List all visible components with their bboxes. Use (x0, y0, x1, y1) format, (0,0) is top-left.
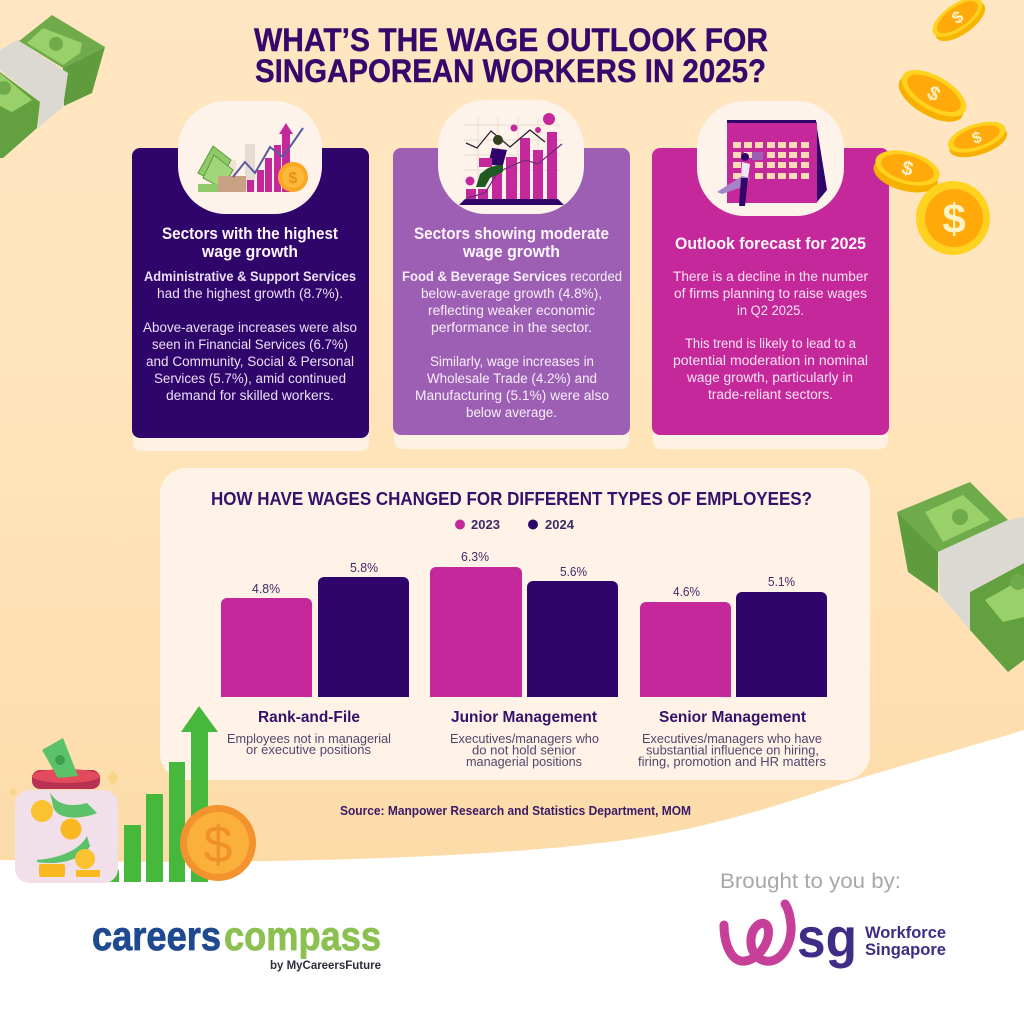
icon: person on bar chart (459, 113, 564, 205)
icon: money stack right (897, 482, 1024, 672)
category: rank-and-file (227, 709, 391, 757)
text block: demand for skilled workers. (166, 388, 334, 403)
title (254, 22, 768, 89)
category: rank-and-file: Rank-and-File (258, 709, 360, 726)
heading (162, 225, 338, 261)
icon: money stack top left (0, 15, 105, 158)
text block: potential moderation in nominal (673, 353, 868, 368)
text block: Food & Beverage Services recorded (402, 269, 622, 284)
category: senior management: substantial influence on hiring, (646, 744, 819, 758)
icon: money and rising bars (198, 123, 308, 192)
icon: falling coins: $ (899, 157, 915, 181)
logo: careers compass: careers (92, 913, 221, 959)
icon: money jar (9, 738, 119, 883)
legend (455, 518, 574, 532)
heading (414, 225, 609, 261)
icon: falling coins (870, 0, 1011, 255)
heading: wage growth (201, 243, 298, 261)
icon: falling coins: $ (942, 195, 966, 242)
text block: There is a decline in the number (673, 269, 869, 284)
category: senior management: firing, promotion and HR matters (638, 755, 826, 769)
panel: wage chart (160, 468, 870, 780)
text block: seen in Financial Services (6.7%) (152, 337, 348, 352)
text block: wage growth, particularly in (686, 370, 853, 385)
category: senior management: Senior Management (659, 709, 807, 726)
category: senior management: Executives/managers who have (642, 732, 822, 746)
legend: 2023 (471, 518, 500, 532)
logo: workforce singapore: Workforce (865, 924, 946, 942)
title: SINGAPOREAN WORKERS IN 2025? (255, 53, 766, 89)
bar chart (221, 550, 827, 697)
icon: coin (180, 805, 256, 881)
icon: money and rising bars: $ (289, 170, 298, 187)
category: senior management (638, 709, 826, 769)
text block: in Q2 2025. (737, 303, 804, 318)
logo: workforce singapore (724, 904, 946, 969)
bar chart: 4.8% (252, 582, 280, 596)
heading: Sectors with the highest (162, 225, 338, 243)
chart title: HOW HAVE WAGES CHANGED FOR DIFFERENT TYPES OF EMPLOYEES? (211, 489, 812, 509)
category: junior management: Executives/managers who (450, 732, 599, 746)
icon: falling coins: $ (948, 7, 967, 28)
legend: 2024 (545, 518, 574, 532)
heading: Sectors showing moderate (414, 225, 609, 243)
text block: trade-reliant sectors. (708, 387, 833, 402)
category: junior management (450, 709, 599, 769)
panel: outlook forecast (652, 101, 889, 449)
category: junior management: managerial positions (466, 755, 582, 769)
text block: Above-average increases were also (143, 320, 357, 335)
logo: careers compass: compass (224, 913, 381, 959)
text block: This trend is likely to lead to a (685, 336, 856, 351)
category: rank-and-file: or executive positions (246, 743, 371, 757)
heading: Outlook forecast for 2025 (675, 235, 866, 253)
icon: falling coins: $ (923, 82, 944, 106)
text block: and Community, Social & Personal (146, 354, 354, 369)
category: junior management: Junior Management (451, 709, 598, 726)
heading: wage growth (462, 243, 560, 261)
category: rank-and-file: Employees not in managerial (227, 732, 391, 746)
icon: coin: $ (204, 816, 233, 874)
icon: calendar (717, 120, 827, 206)
panel: sectors with highest wage growth (132, 101, 369, 451)
text block (402, 269, 622, 420)
bar chart: 5.8% (350, 561, 378, 575)
text block: Wholesale Trade (4.2%) and (427, 371, 597, 386)
bar chart: 4.6% (673, 585, 700, 599)
logo: workforce singapore: Singapore (865, 941, 946, 959)
icon: falling coins: $ (970, 129, 984, 148)
logo: careers compass (92, 913, 381, 972)
title: WHAT’S THE WAGE OUTLOOK FOR (254, 22, 768, 58)
icon: green rising bars with arrow (107, 706, 218, 882)
text block (143, 269, 357, 403)
text block: had the highest growth (8.7%). (157, 286, 343, 301)
panel: sectors showing moderate wage growth (393, 100, 630, 449)
category: junior management: do not hold senior (472, 744, 576, 758)
logo: careers compass: by MyCareersFuture (270, 960, 381, 972)
text block: performance in the sector. (431, 320, 592, 335)
text block (673, 269, 869, 402)
text block: below average. (466, 405, 557, 420)
text block: Services (5.7%), amid continued (154, 371, 346, 386)
text block: Similarly, wage increases in (430, 354, 594, 369)
text block: Administrative & Support Services (144, 269, 356, 284)
logo: workforce singapore: sg (797, 906, 857, 969)
bar chart: 5.1% (768, 575, 795, 589)
text block: reflecting weaker economic (428, 303, 595, 318)
bar chart: 6.3% (461, 550, 489, 564)
text block: below-average growth (4.8%), (421, 286, 602, 301)
text block: of firms planning to raise wages (674, 286, 867, 301)
bar chart: 5.6% (560, 565, 587, 579)
text block: Manufacturing (5.1%) were also (415, 388, 609, 403)
source: Source: Manpower Research and Statistics Department, MOM (340, 804, 691, 818)
brought to you by: Brought to you by: (720, 870, 901, 893)
